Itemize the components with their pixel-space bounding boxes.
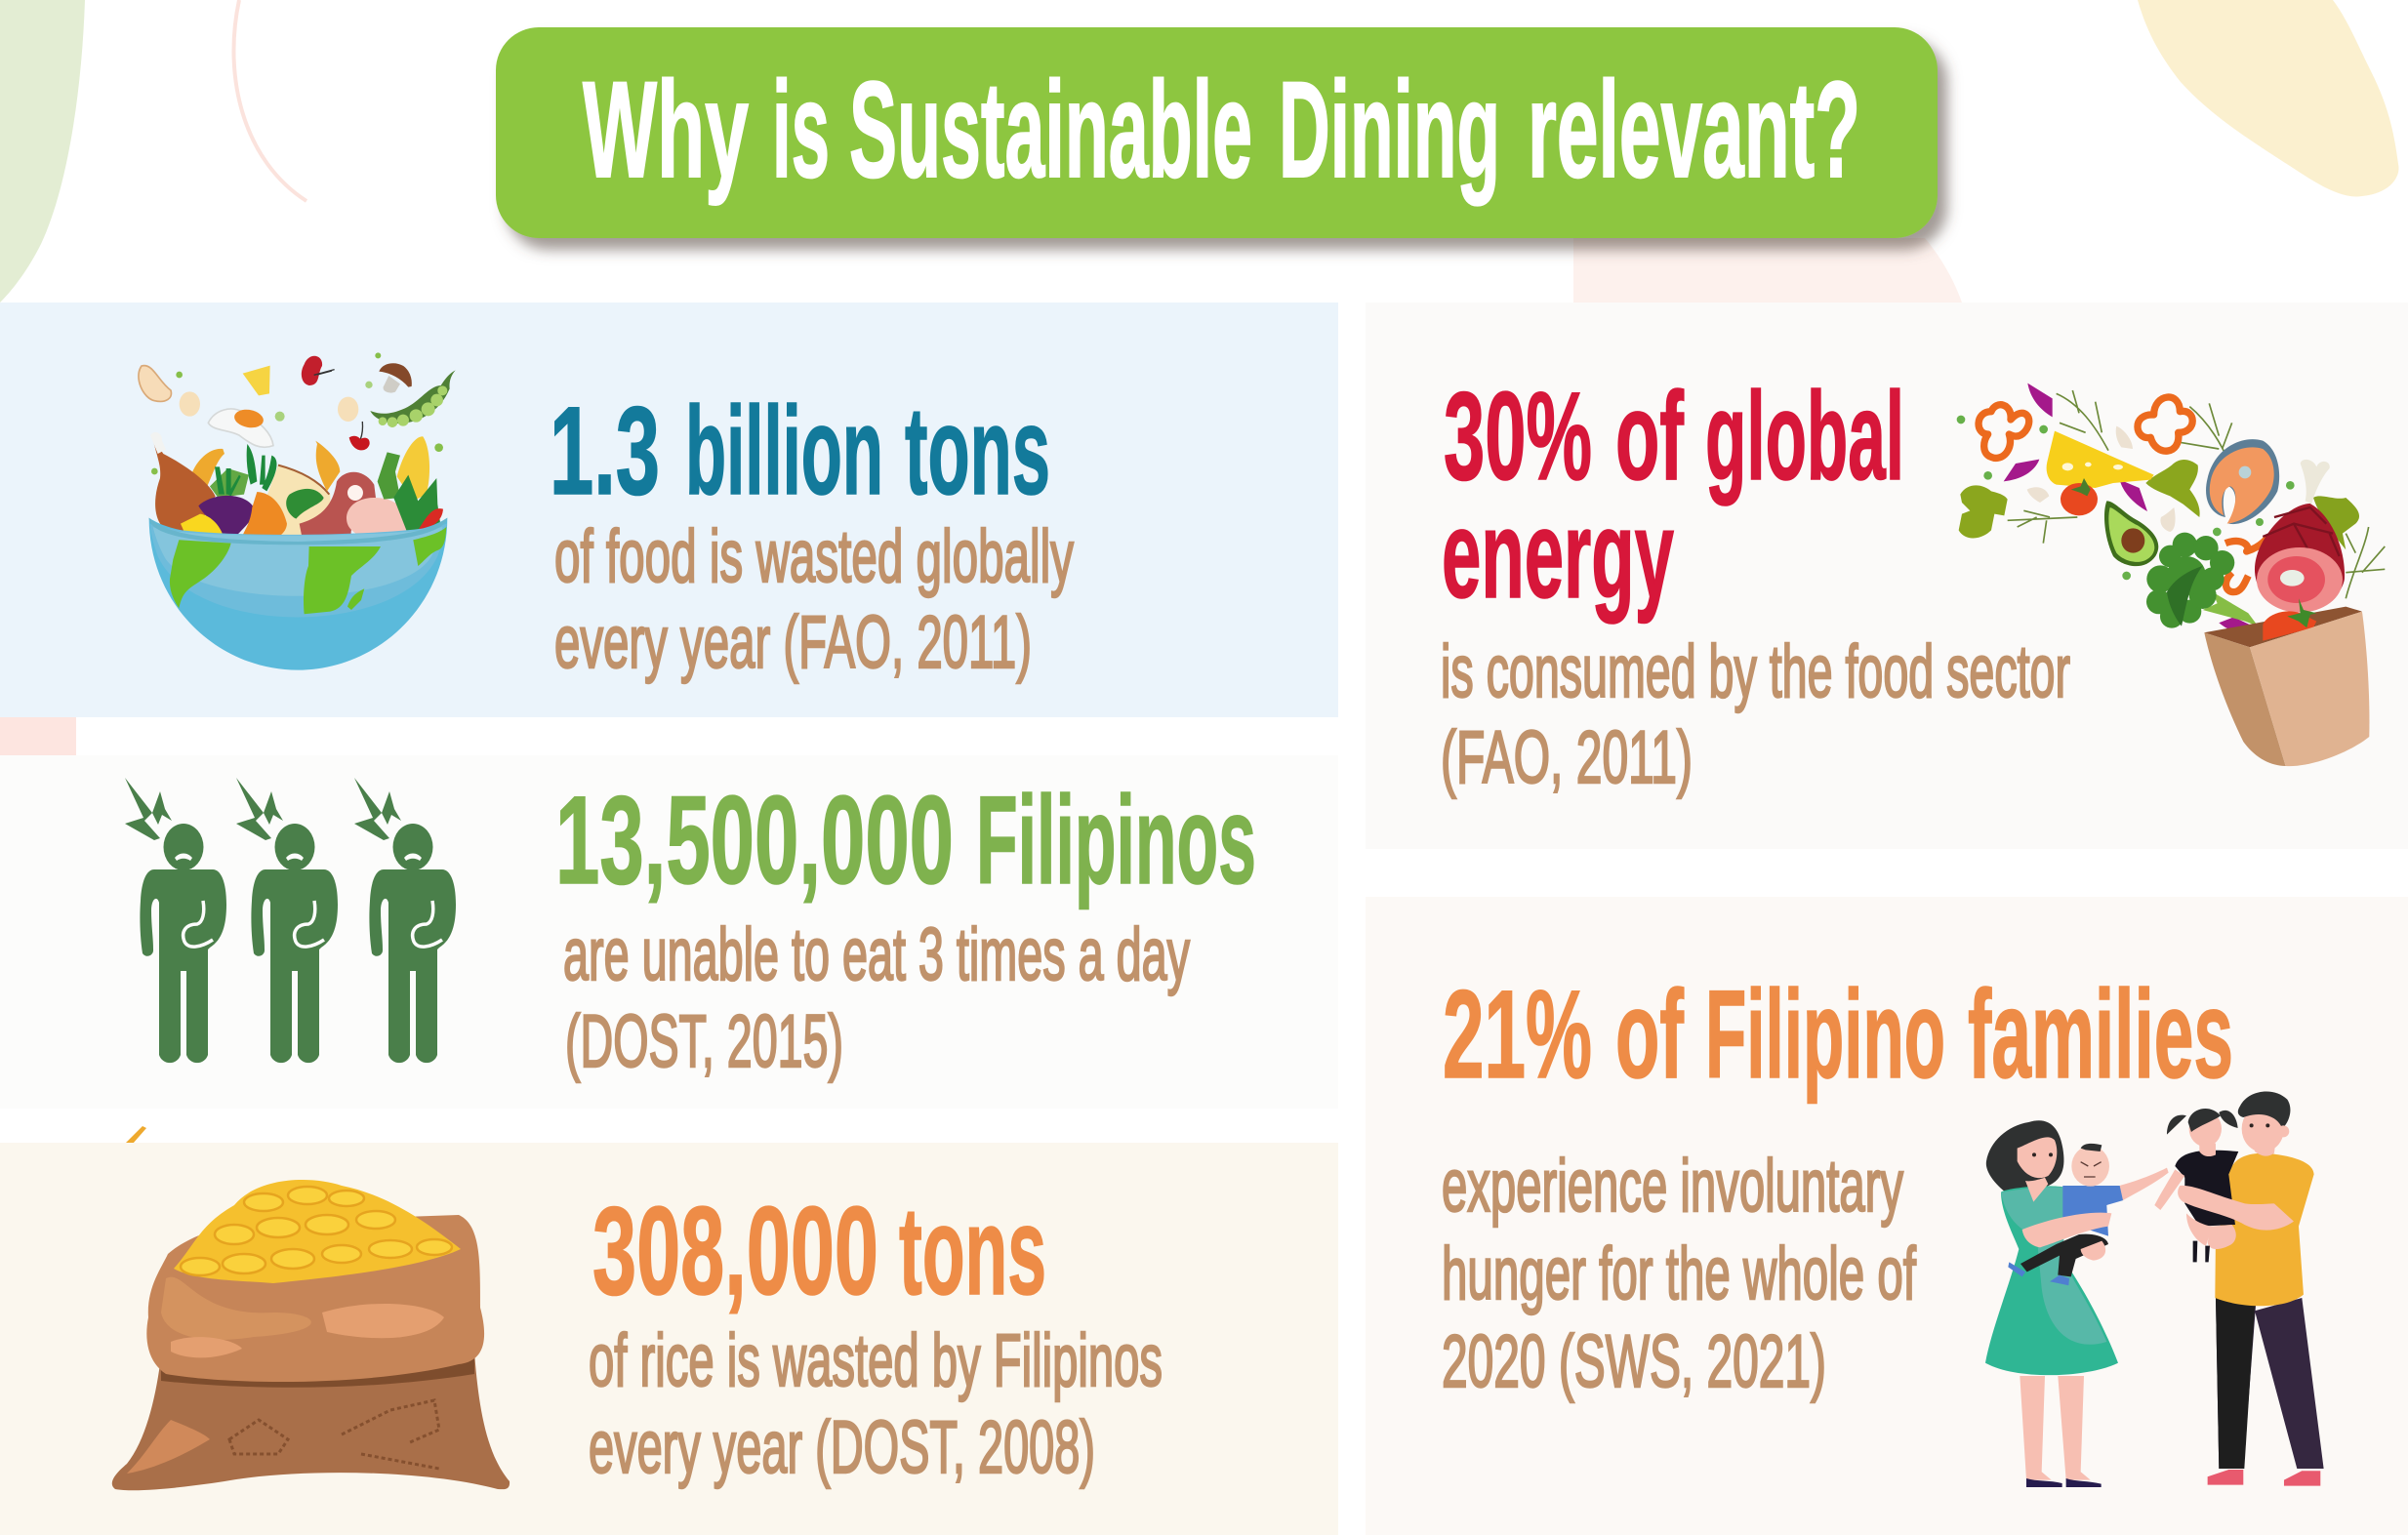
text: food wasted bbox=[554, 515, 1074, 684]
tomato bbox=[2061, 478, 2098, 515]
background blob: yellow bbox=[2138, 0, 2399, 196]
heading: 308,000 tons: 308,000 bbox=[592, 1182, 878, 1321]
pepper rings bbox=[1979, 397, 2267, 592]
title: Sustainable bbox=[849, 53, 1252, 206]
food in bowl bbox=[150, 432, 443, 540]
text: involuntary hunger: experience involuntary bbox=[1442, 1145, 1903, 1228]
illustration: grocery bag with falling food bbox=[1957, 384, 2385, 766]
heading: 30% of global energy: energy bbox=[1442, 485, 1674, 625]
title: Why bbox=[583, 53, 749, 206]
background blob: green bbox=[0, 0, 85, 303]
father and girl bbox=[2154, 1091, 2324, 1486]
heading: 1.3 billion tons: tons bbox=[905, 382, 1050, 521]
paper bag bbox=[2204, 598, 2369, 766]
icon: three hungry people bbox=[125, 778, 456, 1063]
title bbox=[583, 53, 1860, 206]
text: unable to eat: (DOST, 2015) bbox=[565, 1000, 843, 1083]
panel: global energy bbox=[1366, 303, 2408, 849]
panel: hungry Filipinos bbox=[0, 755, 1338, 1109]
text: rice wasted: every year (DOST, 2008) bbox=[589, 1406, 1095, 1489]
heading: 21% of Filipino families bbox=[1443, 965, 2233, 1105]
panel: rice waste bbox=[0, 1143, 1338, 1535]
title: Dining bbox=[1279, 53, 1500, 206]
heading: 30% of global energy: global bbox=[1705, 367, 1904, 506]
title: is bbox=[772, 53, 830, 206]
heading: 13,500,000 Filipinos: 13,500,000 bbox=[555, 771, 954, 910]
ham bbox=[2255, 504, 2345, 613]
bone behind ham bbox=[2301, 460, 2330, 505]
heading: 1.3 billion tons: billion bbox=[685, 382, 883, 521]
illustration: family bbox=[1985, 1091, 2324, 1487]
text: unable to eat: are unable to eat 3 times a day bbox=[563, 913, 1190, 996]
herbs and garnish bbox=[1957, 384, 2385, 633]
continents bbox=[170, 527, 446, 614]
avocado bbox=[2104, 501, 2158, 566]
text: food wasted: of food is wasted globally bbox=[554, 515, 1074, 598]
background shape: pale pink bbox=[1573, 238, 1962, 303]
illustration: globe bowl with food bbox=[139, 352, 456, 670]
cheese bbox=[2047, 431, 2154, 488]
text: involuntary hunger bbox=[1442, 1145, 1917, 1403]
heading: 21% of Filipino families: Filipino bbox=[1705, 965, 1945, 1105]
text: unable to eat bbox=[563, 913, 1190, 1083]
salmon steak bbox=[2206, 439, 2279, 524]
text: food wasted: every year (FAO, 2011) bbox=[554, 601, 1032, 684]
illustration: rice sack bbox=[112, 1180, 510, 1490]
heading: 30% of global energy bbox=[1442, 367, 1904, 625]
panel: Filipino families bbox=[1366, 897, 2408, 1535]
floating ingredients bbox=[139, 352, 456, 474]
title banner bbox=[496, 27, 1938, 238]
text: energy consumed: (FAO, 2011) bbox=[1441, 716, 1693, 799]
sack lower bbox=[112, 1352, 510, 1490]
background shape: pink corner bbox=[0, 715, 76, 756]
background arc: pink bbox=[233, 0, 306, 201]
heading: 30% of global energy: of bbox=[1615, 367, 1684, 506]
mother and baby bbox=[1985, 1120, 2169, 1487]
text: rice wasted bbox=[589, 1319, 1163, 1489]
heading: 1.3 billion tons: 1.3 bbox=[550, 382, 660, 521]
title: relevant? bbox=[1528, 53, 1860, 206]
sack upper bbox=[146, 1215, 484, 1382]
background mark: orange bbox=[125, 1126, 146, 1144]
text: energy consumed bbox=[1441, 630, 2070, 799]
heading: 308,000 tons: tons bbox=[899, 1182, 1046, 1321]
heading: 21% of Filipino families: 21% bbox=[1443, 965, 1592, 1105]
text: rice wasted: of rice is wasted by Filipinos bbox=[589, 1319, 1163, 1402]
bowl body bbox=[149, 518, 447, 670]
rice bbox=[174, 1180, 461, 1283]
bowl shading bbox=[149, 524, 447, 617]
text: involuntary hunger: hunger for the whole of bbox=[1442, 1232, 1917, 1315]
heading: 13,500,000 Filipinos: Filipinos bbox=[976, 771, 1256, 910]
broccoli bbox=[2146, 533, 2258, 628]
heading: 21% of Filipino families: of bbox=[1615, 965, 1684, 1105]
heading: 30% of global energy: 30% bbox=[1444, 367, 1592, 506]
panel: food waste bbox=[0, 303, 1338, 717]
text: involuntary hunger: 2020 (SWS, 2021) bbox=[1442, 1320, 1826, 1403]
